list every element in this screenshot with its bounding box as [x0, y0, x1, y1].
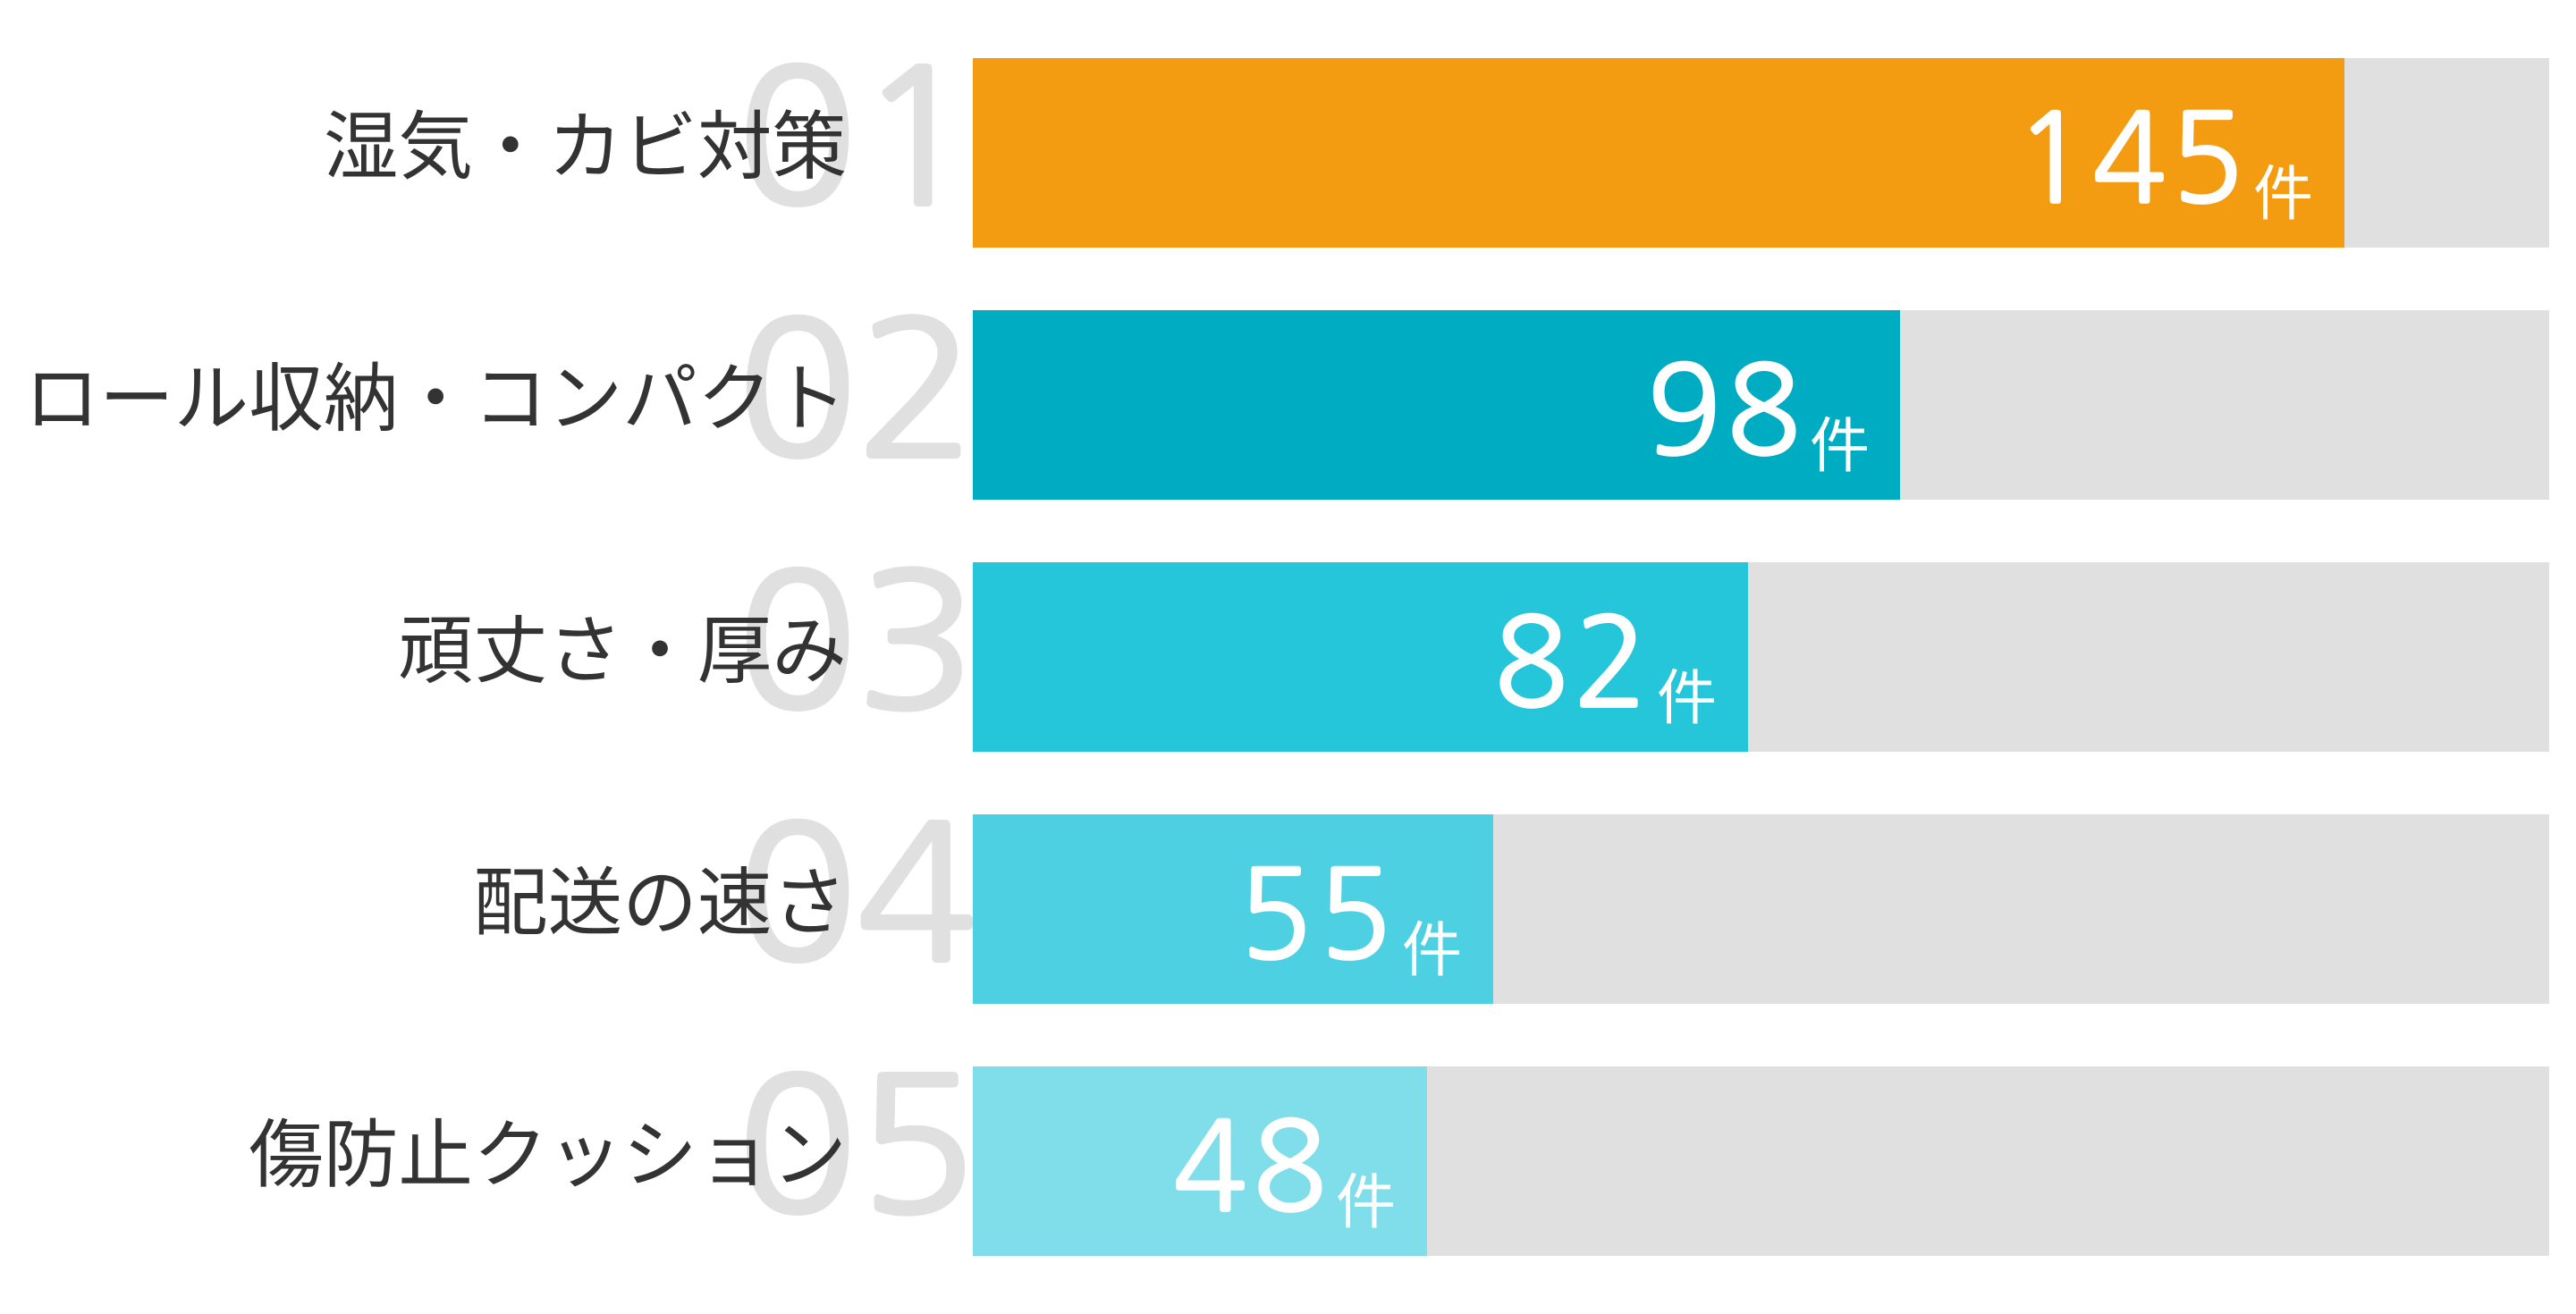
rank number 03: 03	[737, 550, 976, 736]
unit 4: 件	[1402, 917, 1462, 984]
track 2	[973, 310, 2549, 500]
row 3: durability and thickness	[398, 550, 2549, 752]
label 1: 湿気・カビ対策	[324, 105, 847, 189]
label 5: 傷防止クッション	[249, 1113, 847, 1197]
track 1	[973, 58, 2549, 248]
bar 5	[973, 1066, 1427, 1256]
label 2: ロール収納・コンパクト	[24, 357, 847, 441]
unit 5: 件	[1336, 1169, 1396, 1236]
rank number 04: 04	[737, 802, 976, 988]
rank number 02: 02	[737, 298, 976, 484]
value 98: 98	[1647, 350, 1806, 472]
row 1: humidity and mold	[324, 46, 2549, 248]
track 5	[973, 1066, 2549, 1256]
label 4: 配送の速さ	[473, 861, 847, 945]
row 2: roll storage and compact	[24, 298, 2549, 500]
value 48: 48	[1173, 1106, 1332, 1228]
unit 1: 件	[2253, 161, 2313, 228]
value 82: 82	[1494, 602, 1653, 724]
value 55: 55	[1238, 854, 1398, 976]
bar 4	[973, 814, 1493, 1004]
bar 2	[973, 310, 1900, 500]
unit 3: 件	[1657, 665, 1717, 732]
rank number 05: 05	[737, 1054, 976, 1240]
value 145: 145	[2014, 97, 2248, 220]
bar 1	[973, 58, 2344, 248]
track 4	[973, 814, 2549, 1004]
bar 3	[973, 562, 1748, 752]
track 3	[973, 562, 2549, 752]
label 3: 頑丈さ・厚み	[398, 609, 847, 693]
rank number 01: 01	[737, 46, 976, 232]
row 4: delivery speed	[473, 802, 2549, 1004]
row 5: damage prevention cushion	[249, 1054, 2549, 1256]
unit 2: 件	[1810, 413, 1870, 480]
